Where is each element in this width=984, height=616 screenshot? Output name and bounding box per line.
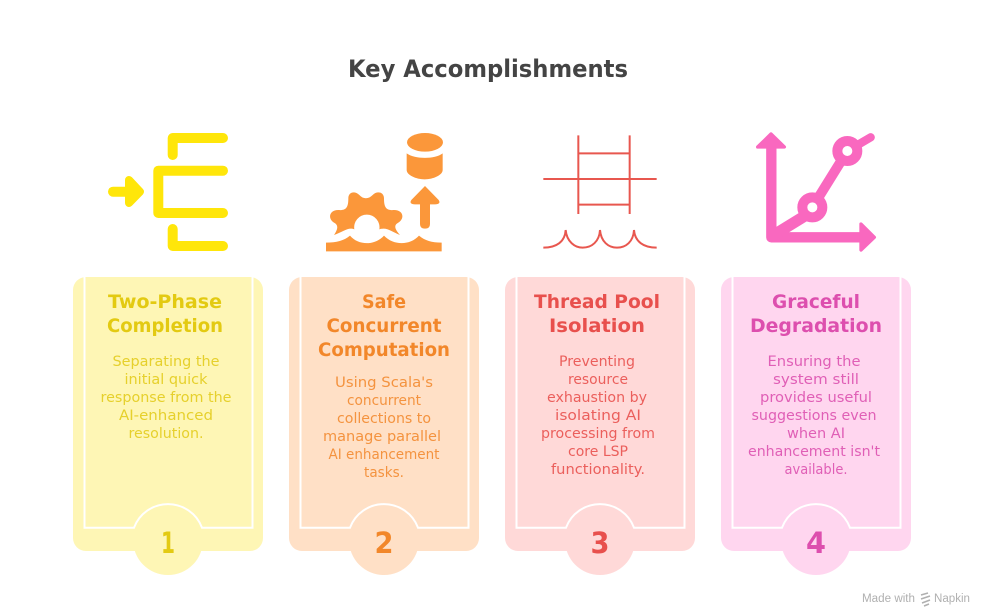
body text: Ensuring the: [768, 354, 860, 370]
body text: core LSP: [568, 444, 628, 460]
body text: processing from: [541, 426, 655, 442]
body text: Preventing: [559, 354, 635, 370]
database: [407, 133, 443, 179]
body text: when AI: [787, 426, 845, 442]
body text: system still: [773, 372, 859, 388]
body text: AI-enhanced: [119, 408, 213, 424]
heading: Completion: [107, 315, 223, 337]
body text: initial quick: [124, 372, 208, 388]
watermark: Made with Napkin: Napkin: [934, 593, 970, 605]
heading: [318, 291, 450, 361]
body text: AI enhancement: [328, 447, 440, 463]
body text: [100, 354, 232, 442]
body text: resource: [568, 372, 628, 388]
body text: concurrent: [347, 393, 421, 409]
number 4: 4: [806, 526, 826, 560]
title: Key Accomplishments: [348, 55, 628, 83]
panel: Two-Phase Completion: [73, 277, 263, 575]
panel: Graceful Degradation: [721, 277, 911, 575]
body text: isolating AI: [555, 408, 641, 424]
body text: response from the: [100, 390, 232, 406]
panel: Thread Pool Isolation: [505, 277, 695, 575]
number 1: 1: [161, 526, 175, 560]
body text: [748, 354, 881, 478]
heading: Graceful: [772, 291, 860, 313]
body text: resolution.: [128, 426, 204, 442]
body text: provides useful: [760, 390, 872, 406]
body text: Using Scala's: [335, 375, 433, 391]
body text: manage parallel: [323, 429, 441, 445]
body text: tasks.: [364, 465, 404, 481]
heading: [534, 291, 660, 337]
heading: Safe: [362, 291, 406, 313]
body text: exhaustion by: [547, 390, 647, 406]
icon: two-phase bracket with arrow: [113, 138, 223, 246]
body text: available.: [784, 462, 848, 478]
body text: [323, 375, 441, 481]
heading: Computation: [318, 339, 450, 361]
watermark: Made with Napkin: Made with: [862, 593, 915, 605]
heading: Two-Phase: [108, 291, 222, 313]
watermark: Made with Napkin: [862, 593, 970, 606]
heading: [750, 291, 882, 337]
body text: enhancement isn't: [748, 444, 881, 460]
body text: collections to: [337, 411, 431, 427]
heading: [107, 291, 223, 337]
number 2: 2: [374, 526, 394, 560]
number 3: 3: [590, 526, 610, 560]
body text: suggestions even: [752, 408, 876, 424]
icon: thread grid over scallops: [543, 135, 657, 248]
body text: functionality.: [551, 462, 645, 478]
heading: Degradation: [750, 315, 882, 337]
heading: Isolation: [549, 315, 645, 337]
icon: gear, waves and database: [326, 133, 443, 251]
heading: Thread Pool: [534, 291, 660, 313]
heading: Concurrent: [326, 315, 442, 337]
body text: [541, 354, 655, 478]
gear, arrow and waves: [326, 186, 442, 251]
body text: Separating the: [112, 354, 220, 370]
icon: rising line chart with axes: [758, 134, 874, 250]
panel: Safe Concurrent Computation: [289, 277, 479, 575]
